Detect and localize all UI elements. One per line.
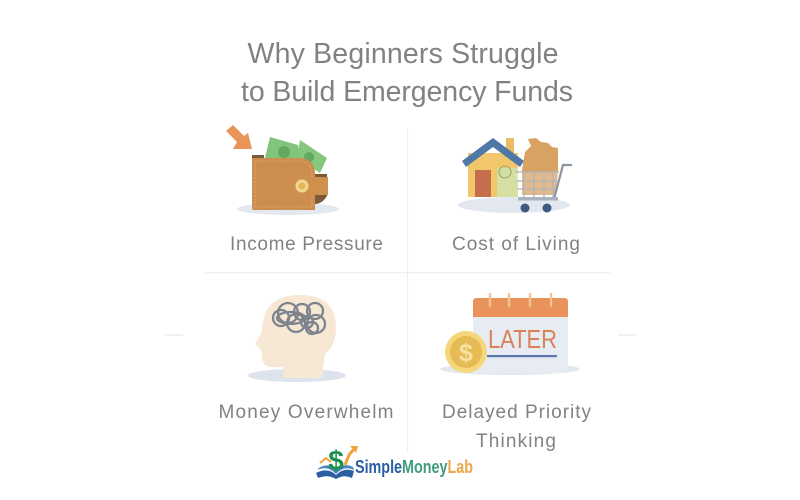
icon: head with tangled thoughts xyxy=(248,295,346,382)
icon: wallet with cash xyxy=(226,125,339,215)
icon: calendar with later and coin: LATER xyxy=(488,324,557,354)
icon: book with dollar and arrow xyxy=(316,445,358,479)
title xyxy=(241,38,573,108)
icon: calendar with later and coin: $ xyxy=(459,339,473,367)
label: delayed priority thinking xyxy=(442,402,592,452)
title: to Build Emergency Funds xyxy=(241,76,573,108)
panel: delayed priority thinking xyxy=(440,294,592,452)
logo: simplemoneylab xyxy=(316,445,473,479)
label: money overwhelm: Money Overwhelm xyxy=(218,402,394,423)
label: cost of living: Cost of Living xyxy=(452,234,580,255)
icon: house and shopping cart xyxy=(458,138,572,213)
icon: calendar with later and coin xyxy=(440,294,580,375)
label: income pressure: Income Pressure xyxy=(230,234,383,255)
icon: book with dollar and arrow: $ xyxy=(328,445,344,476)
wordmark: SimpleMoneyLab xyxy=(355,457,473,477)
title: Why Beginners Struggle xyxy=(248,38,558,70)
label: delayed priority thinking: Delayed Priority xyxy=(442,402,592,423)
panel: income pressure xyxy=(226,125,383,255)
label: delayed priority thinking: Thinking xyxy=(476,431,556,452)
panel: cost of living xyxy=(452,138,580,255)
panel: money overwhelm xyxy=(218,295,394,423)
